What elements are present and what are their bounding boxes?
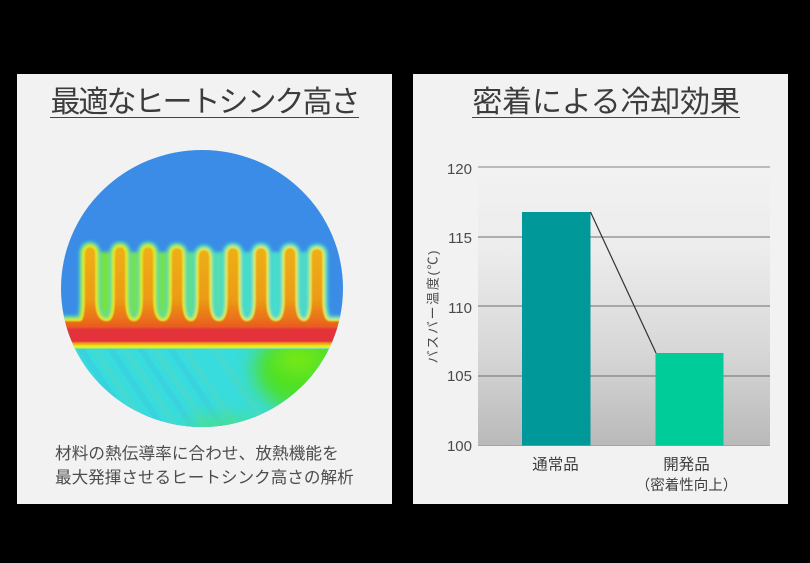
caption: 材料の熱伝導率に合わせ、放熱機能を: [55, 444, 339, 463]
plot background: [478, 167, 770, 446]
fins and base with temperature halo: [55, 248, 350, 345]
heading: cooling effect by adhesion: 密着による冷却効果: [472, 86, 740, 119]
x-axis labels: 通常品: [532, 456, 579, 474]
y-axis title: バスバー温度(℃): [426, 250, 440, 364]
caption: 最大発揮させるヒートシンク高さの解析: [55, 468, 354, 487]
caption: [55, 444, 354, 487]
bar: developed product: [656, 353, 724, 446]
y-axis tick labels: [447, 161, 472, 455]
x-axis labels: （密着性向上）: [636, 477, 737, 494]
lower body: [75, 348, 329, 427]
connector line: [590, 212, 656, 353]
y-axis tick labels: 120: [447, 161, 472, 178]
y-axis tick labels: 105: [447, 368, 472, 385]
panel: cooling effect: [413, 74, 788, 504]
y-axis tick labels: 115: [448, 230, 472, 247]
x-axis labels: 開発品: [663, 456, 710, 474]
x-axis labels: [532, 456, 737, 494]
thermal simulation circle: [61, 150, 343, 427]
y-axis tick labels: 110: [448, 300, 472, 317]
panel: optimal heat sink height: [17, 74, 392, 504]
heading: optimal heat sink height: 最適なヒートシンク高さ: [50, 86, 358, 119]
bar: standard product: [522, 212, 590, 446]
y-axis tick labels: 100: [447, 438, 472, 455]
